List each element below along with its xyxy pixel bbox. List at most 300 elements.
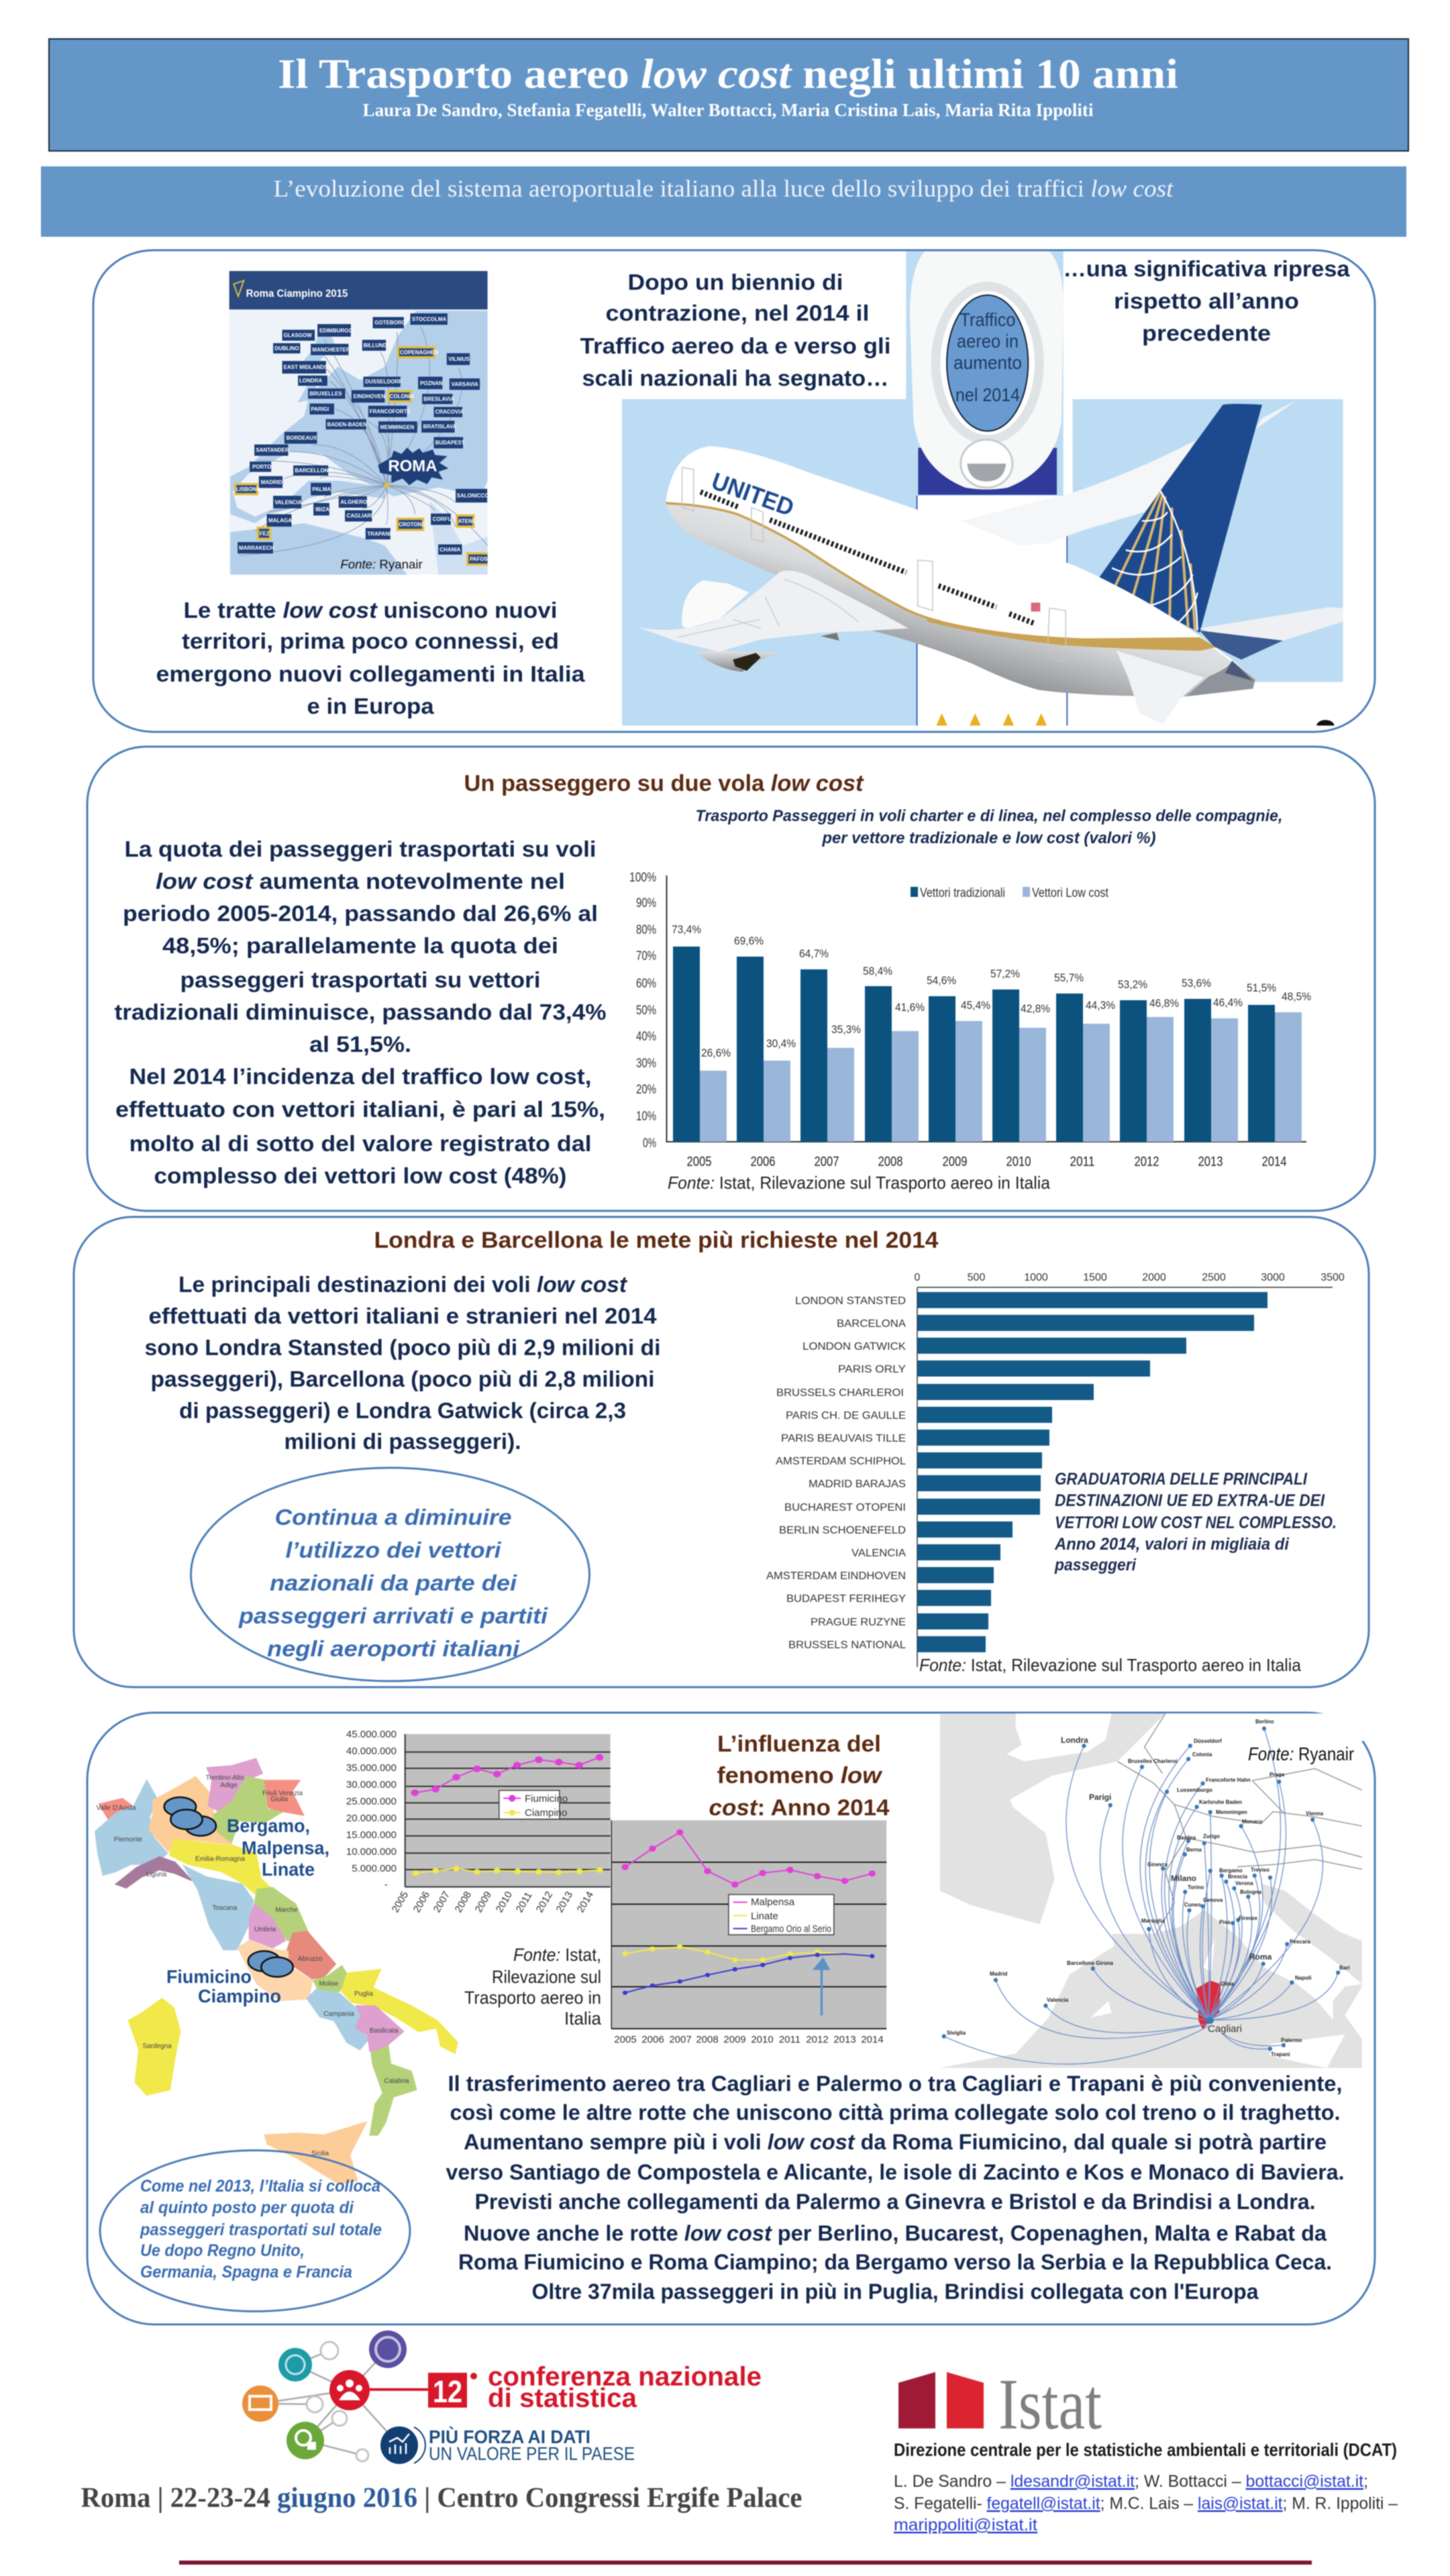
route map from Cagliari: Berna [1186, 1847, 1202, 1853]
Rome Ciampino route map: GOTEBORG [374, 320, 406, 326]
line chart: Rome airports: 40.000.000 [346, 1746, 397, 1757]
route map from Cagliari: Verona [1235, 1880, 1253, 1886]
chart legend [911, 886, 1109, 900]
text: main destinations: Le principali destinazioni dei voli low cost [178, 1272, 628, 1297]
text: passenger share: complesso dei vettori low cost (48%) [154, 1163, 566, 1188]
line chart: Rome airports: 2012 [534, 1890, 555, 1915]
line chart: Rome airports: - [384, 1879, 388, 1890]
chart caption [1054, 1470, 1337, 1574]
Rome Ciampino route map: LONDRA [299, 378, 322, 384]
route map from Cagliari: Torino [1188, 1884, 1204, 1890]
bar chart: destinations ranking: BUCHAREST OTOPENI [784, 1502, 906, 1513]
route map from Cagliari: Trapani [1271, 2051, 1290, 2057]
Rome Ciampino route map: BADEN-BADEN [327, 421, 367, 427]
route map from Cagliari: Marsiglia [1141, 1918, 1165, 1924]
map of Italy: Friuli Venezia [262, 1790, 303, 1797]
line chart: Milan airports: 2006 [641, 2034, 664, 2045]
map labels: Malpensa, [242, 1837, 329, 1858]
map of Italy: Calabria [384, 2078, 409, 2085]
Rome Ciampino route map: SALONICCO [457, 493, 489, 499]
window frame [906, 252, 1064, 496]
map labels: Fiumicino [166, 1966, 252, 1987]
route map from Cagliari: Siviglia [947, 2030, 966, 2036]
callout ellipse: Italy fifth [100, 2151, 410, 2312]
text: main destinations: effettuati da vettori italiani e stranieri nel 2014 [149, 1303, 657, 1328]
line chart: Milan airports: Linate [751, 1911, 778, 1922]
Rome Ciampino route map: ROMA [388, 458, 437, 476]
text: new routes: Oltre 37mila passeggeri in più in Puglia, Brindisi collegata con l'Europa [531, 2279, 1259, 2304]
callout ellipse: Italy fifth: Ue dopo Regno Unito, [140, 2241, 305, 2260]
Rome Ciampino route map: GLASGOW [284, 333, 312, 339]
line chart: Rome airports: 2014 [575, 1890, 596, 1915]
Rome Ciampino route map: PAFOS [470, 556, 488, 562]
bar chart: destinations ranking: BRUSSELS CHARLEROI [776, 1387, 904, 1399]
line chart: Milan airports: Malpensa [751, 1896, 795, 1908]
route map from Cagliari: Bruxelles Charleroi [1128, 1758, 1177, 1764]
line chart: Rome airports: 2010 [494, 1890, 515, 1915]
bar chart: destinations ranking: AMSTERDAM EINDHOVEN [766, 1570, 906, 1582]
chart caption: VETTORI LOW COST NEL COMPLESSO. [1055, 1513, 1337, 1532]
bar chart: traditional vs low cost: 2011 [1070, 1155, 1095, 1169]
line chart: Rome airports: 5.000.000 [352, 1863, 397, 1874]
text: passenger share: passeggeri trasportati su vettori [180, 967, 541, 992]
bar chart: traditional vs low cost: 53,2% [1118, 978, 1147, 991]
Rome Ciampino route map: MANCHESTER [312, 347, 350, 353]
bar chart: traditional vs low cost: 60% [636, 977, 656, 991]
conference logo [242, 2330, 762, 2464]
line chart: Milan airports: 2009 [723, 2034, 746, 2045]
heading: Un passeggero su due vola low cost [464, 771, 864, 796]
map of Italy: Liguria [146, 1871, 166, 1878]
Rome Ciampino route map: ATENE [458, 518, 476, 524]
bar chart: destinations ranking: BARCELONA [837, 1318, 906, 1330]
text: main destinations: sono Londra Stansted (poco più di 2,9 milioni di [145, 1335, 660, 1360]
window label: aumento [953, 352, 1022, 373]
map of Italy: Puglia [354, 1990, 373, 1998]
Rome Ciampino route map: EAST MIDLANDS [284, 364, 328, 370]
Rome Ciampino route map: Fonte: Ryanair [340, 557, 423, 572]
Rome Ciampino route map: BRESLAVIA [423, 396, 454, 402]
map of Italy: Umbria [254, 1926, 276, 1933]
source note: Trasporto aereo in [464, 1988, 601, 2008]
route map from Cagliari: Palermo [1281, 2037, 1302, 2043]
route map from Cagliari: Lussemburgo [1177, 1787, 1212, 1793]
bar chart: traditional vs low cost: 70% [636, 949, 656, 963]
route map from Cagliari: Pescara [1290, 1939, 1310, 1945]
text: new routes: Previsti anche collegamenti da Palermo a Ginevra e Bristol e da Brindisi a Londra. [475, 2190, 1315, 2214]
bar chart: traditional vs low cost: 2006 [750, 1155, 776, 1169]
route map from Cagliari: Francoforte Hahn [1206, 1777, 1251, 1783]
subtitle banner: L’evoluzione del sistema aeroportuale italiano alla luce dello sviluppo dei traffici low cost [274, 175, 1174, 202]
bar chart: traditional vs low cost: 50% [636, 1004, 656, 1018]
map of Italy: Adige [220, 1782, 238, 1789]
bar chart: destinations ranking: LONDON STANSTED [795, 1295, 906, 1307]
Rome Ciampino route map: SANTANDER [256, 447, 289, 453]
callout ellipse: Italy fifth: Come nel 2013, l’Italia si colloca [140, 2177, 380, 2196]
bar chart: destinations ranking: MADRID BARAJAS [809, 1479, 906, 1490]
bar chart: traditional vs low cost: 2013 [1198, 1155, 1223, 1169]
route map from Cagliari: Vienna [1306, 1811, 1324, 1817]
callout ellipse: national carriers [191, 1468, 589, 1681]
line chart: Rome airports: 25.000.000 [346, 1796, 397, 1807]
bar chart: destinations ranking: 2000 [1142, 1272, 1166, 1283]
line chart: Milan airports: 2005 [614, 2034, 637, 2045]
bar chart: traditional vs low cost: 30% [636, 1057, 656, 1071]
Rome Ciampino route map: CORFU [433, 517, 452, 523]
text: after two years of contraction: scali nazionali ha segnato… [582, 366, 888, 390]
text: new routes: così come le altre rotte che uniscono città prima collegate solo col treno o il traghetto. [450, 2100, 1341, 2125]
text: new routes: Il trasferimento aereo tra Cagliari e Palermo o tra Cagliari e Trapani è più conveniente, [448, 2072, 1343, 2096]
route map from Cagliari: Ginevra [1147, 1862, 1168, 1868]
Rome Ciampino route map: BORDEAUX [287, 435, 317, 441]
map labels: Ciampino [198, 1986, 281, 2006]
bar chart: traditional vs low cost: 42,8% [1021, 1002, 1050, 1015]
bar chart: traditional vs low cost: 0% [643, 1136, 656, 1150]
bar chart: destinations ranking: 2500 [1202, 1272, 1226, 1283]
bar chart: destinations ranking: 3500 [1320, 1272, 1345, 1283]
Rome Ciampino route map: COLONIA [390, 393, 415, 399]
Rome Ciampino route map: EINDHOVEN [354, 393, 385, 399]
bar chart: traditional vs low cost: 100% [629, 871, 656, 885]
stabilizer [1200, 607, 1343, 641]
heading [709, 1731, 890, 1821]
route map from Cagliari: Parigi [1089, 1792, 1111, 1802]
map labels [166, 1815, 329, 2006]
source note: Rilevazione sul [492, 1967, 601, 1987]
route map from Cagliari: Pisa [1219, 1919, 1231, 1925]
callout ellipse: national carriers: negli aeroporti italiani [267, 1636, 520, 1661]
route map from Cagliari: Genova [1203, 1897, 1223, 1903]
text: new routes: Nuove anche le rotte low cost per Berlino, Bucarest, Copenaghen, Malta e Rabat da [464, 2221, 1327, 2245]
contacts [894, 2440, 1398, 2534]
source note: Fonte: Istat, Rilevazione sul Trasporto aereo in Italia [919, 1655, 1302, 1675]
bar chart: traditional vs low cost: 80% [636, 923, 656, 937]
map of Italy: Piemonte [114, 1836, 143, 1843]
route map from Cagliari: Cuneo [1184, 1902, 1201, 1908]
conference logo: UN VALORE PER IL PAESE [429, 2443, 635, 2464]
Rome Ciampino route map: PARIGI [311, 406, 329, 412]
text: low cost routes: Le tratte low cost uniscono nuovi [184, 598, 557, 623]
fuselage [666, 446, 1255, 696]
text: passenger share: al 51,5%. [309, 1032, 411, 1057]
panel: one passenger in two [87, 747, 1375, 1211]
text: passenger share: 48,5%; parallelamente la quota dei [162, 933, 558, 958]
route map from Cagliari: Brescia [1228, 1874, 1247, 1880]
bar chart: traditional vs low cost: 35,3% [831, 1023, 861, 1036]
conference logo: di statistica [488, 2383, 637, 2413]
heading: cost: Anno 2014 [709, 1795, 890, 1821]
route map from Cagliari: Karlsruhe Baden [1199, 1799, 1242, 1805]
Rome Ciampino route map: LISBONA [236, 486, 260, 492]
route map from Cagliari: Colonia [1192, 1752, 1212, 1758]
line chart: Rome airports: 2008 [453, 1890, 474, 1915]
window label: Traffico [960, 309, 1016, 330]
window label: aereo in [957, 331, 1019, 352]
line chart: Milan airports: 2011 [779, 2034, 800, 2045]
chart caption: DESTINAZIONI UE ED EXTRA-UE DEI [1055, 1491, 1325, 1510]
bar chart: traditional vs low cost: 53,6% [1182, 977, 1211, 989]
bar chart: traditional vs low cost: 69,6% [734, 934, 764, 947]
bar chart: destinations ranking: PARIS BEAUVAIS TILLE [781, 1433, 906, 1444]
route map from Cagliari: Cagliari [1208, 2023, 1242, 2035]
bar chart: traditional vs low cost: 73,4% [672, 923, 701, 936]
line chart: Milan airports: Bergamo Orio al Serio [751, 1923, 831, 1935]
bar chart: traditional vs low cost: 90% [636, 896, 656, 910]
text: significant recovery: precedente [1142, 321, 1271, 345]
subtitle banner [41, 166, 1406, 237]
Rome Ciampino route map: BRUXELLES [309, 390, 342, 396]
Rome Ciampino route map: CROTONE [399, 522, 425, 528]
bar chart: traditional vs low cost: 57,2% [990, 967, 1020, 980]
line chart: Milan airports: 2013 [833, 2034, 856, 2045]
Rome Ciampino route map: DUSSELDORF [365, 379, 402, 385]
bar chart: traditional vs low cost: 20% [636, 1083, 656, 1097]
text: after two years of contraction: Traffico aereo da e verso gli [580, 333, 891, 358]
Rome Ciampino route map: IBIZA [315, 506, 329, 513]
line chart: Rome airports: 2009 [473, 1890, 494, 1915]
callout ellipse: national carriers: l’utilizzo dei vettori [286, 1538, 501, 1562]
Istat logo: Istat [998, 2365, 1102, 2445]
chart title: per vettore tradizionale e low cost (valori %) [822, 829, 1155, 847]
bar chart: traditional vs low cost: 51,5% [1247, 981, 1276, 994]
text: low cost routes: emergono nuovi collegamenti in Italia [156, 661, 585, 686]
line chart: Rome airports: 45.000.000 [346, 1729, 397, 1740]
route map from Cagliari: Memmingen [1216, 1809, 1247, 1815]
Rome Ciampino route map [229, 271, 489, 575]
route map from Cagliari: Milano [1171, 1874, 1196, 1883]
line chart: Rome airports: 2013 [554, 1890, 575, 1915]
map labels: Bergamo, [227, 1815, 310, 1836]
map of Italy: Emilia-Romagna [195, 1856, 245, 1863]
bar chart: traditional vs low cost: 2007 [815, 1155, 839, 1169]
text: passenger share: low cost aumenta notevolmente nel [156, 869, 565, 894]
contacts: L. De Sandro – ldesandr@istat.it; W. Bottacci – bottacci@istat.it; [894, 2472, 1368, 2491]
line chart: Milan airports: 2010 [751, 2034, 774, 2045]
source note: Fonte: Ryanair [1248, 1743, 1354, 1764]
conference date and venue: Roma | 22-23-24 giugno 2016 | Centro Congressi Ergife Palace [81, 2483, 802, 2514]
route map from Cagliari: Roma [1249, 1952, 1272, 1962]
text: low cost routes: territori, prima poco connessi, ed [182, 629, 559, 653]
bar chart: destinations ranking: AMSTERDAM SCHIPHOL [776, 1456, 906, 1467]
Rome Ciampino route map: BUDAPEST [435, 440, 465, 446]
map of Italy: Basilicata [370, 2027, 399, 2035]
bar chart: traditional vs low cost: 44,3% [1086, 999, 1115, 1012]
Rome Ciampino route map: CHANIA [439, 547, 461, 553]
text: passenger share: molto al di sotto del valore registrato dal [129, 1131, 592, 1156]
bar chart: traditional vs low cost: 40% [636, 1030, 656, 1044]
text: passenger share: tradizionali diminuisce, passando dal 73,4% [114, 1000, 607, 1024]
map of Italy: Molise [319, 1980, 339, 1988]
bar chart: destinations ranking: 500 [968, 1272, 985, 1283]
route map from Cagliari: Treviso [1251, 1867, 1270, 1873]
source note: Italia [564, 2008, 602, 2029]
Rome Ciampino route map: DUBLINO [274, 345, 299, 352]
map of Italy: Abruzzo [298, 1955, 323, 1963]
line chart: Rome airports: Fiumicino [525, 1793, 568, 1805]
source note [464, 1945, 602, 2029]
callout ellipse: Italy fifth: Germania, Spagna e Francia [140, 2263, 352, 2282]
line chart: Rome airports: 35.000.000 [346, 1762, 397, 1774]
window label: nel 2014 [955, 384, 1020, 405]
bar chart: traditional vs low cost: 2009 [942, 1155, 968, 1169]
conference logo: 12 [433, 2374, 462, 2409]
Rome Ciampino route map: BILLUND [364, 343, 387, 349]
Rome Ciampino route map: MARRAKECH [239, 545, 274, 551]
bar chart: destinations ranking: BRUSSELS NATIONAL [788, 1640, 906, 1651]
Rome Ciampino route map: FRANCOFORTE [370, 409, 411, 415]
text: new routes [446, 2072, 1345, 2304]
panel: influence of low cost [87, 1707, 1379, 2324]
bar chart: traditional vs low cost: 30,4% [766, 1037, 796, 1050]
text: passenger share: periodo 2005-2014, passando dal 26,6% al [123, 901, 598, 926]
Rome Ciampino route map: BARCELLONA [295, 468, 332, 474]
Rome Ciampino route map: CRACOVIA [435, 409, 464, 415]
chart caption: GRADUATORIA DELLE PRINCIPALI [1055, 1470, 1308, 1489]
bar chart: traditional vs low cost: 2010 [1006, 1155, 1031, 1169]
text: main destinations [145, 1272, 660, 1454]
bar chart: destinations ranking: 1000 [1024, 1272, 1048, 1283]
bar chart: destinations ranking: 3000 [1261, 1272, 1285, 1283]
route map from Cagliari: Monaco [1242, 1819, 1262, 1825]
text: low cost routes: e in Europa [307, 694, 434, 718]
bar chart: traditional vs low cost: 2012 [1134, 1155, 1159, 1169]
bar chart: destinations ranking: 1500 [1083, 1272, 1107, 1283]
Rome Ciampino route map: PALMA [312, 486, 331, 492]
illustration: United airplane [622, 252, 1343, 726]
title banner: Laura De Sandro, Stefania Fegatelli, Walter Bottacci, Maria Cristina Lais, Maria Rita Ippoliti [362, 100, 1094, 120]
route map from Cagliari: Berlino [1255, 1719, 1274, 1725]
Rome Ciampino route map: MEMMINGEN [380, 424, 414, 430]
bar chart: destinations ranking: PRAGUE RUZYNE [811, 1617, 906, 1628]
heading: Londra e Barcellona le mete più richieste nel 2014 [374, 1228, 939, 1253]
conference logo: PIÙ FORZA AI DATI [429, 2426, 590, 2447]
contacts: marippoliti@istat.it [894, 2516, 1037, 2534]
route map from Cagliari: Düsseldorf [1194, 1738, 1222, 1744]
route map from Cagliari: Valencia [1047, 1997, 1069, 2003]
line chart: Rome airports: 2006 [411, 1890, 432, 1915]
text: main destinations: di passeggeri) e Londra Gatwick (circa 2,3 [179, 1398, 626, 1423]
line chart: Rome airports: Ciampino [525, 1807, 567, 1819]
bar chart: destinations ranking: PARIS ORLY [838, 1364, 906, 1375]
text: significant recovery [1063, 256, 1350, 345]
bar chart: traditional vs low cost: 10% [636, 1110, 656, 1124]
line chart: Milan airports [611, 1821, 886, 2045]
map of Italy: Marche [275, 1907, 298, 1914]
route map from Cagliari: Firenze [1239, 1915, 1258, 1921]
text: new routes: Aumentano sempre più i voli low cost da Roma Fiumicino, dal quale si potrà partire [464, 2130, 1327, 2154]
chart caption: Anno 2014, valori in migliaia di [1054, 1535, 1290, 1554]
route map from Cagliari: Zurigo [1203, 1833, 1220, 1839]
source note: Fonte: Istat, [513, 1945, 601, 1965]
text: after two years of contraction: contrazione, nel 2014 il [605, 301, 870, 325]
bar chart: traditional vs low cost: 46,4% [1213, 996, 1243, 1009]
line chart: Milan airports: 2008 [696, 2034, 719, 2045]
near wing and engine [682, 580, 749, 629]
route map from Cagliari [940, 1707, 1379, 2068]
tail cone [1117, 651, 1204, 724]
Rome Ciampino route map: TRAPANI [367, 531, 391, 537]
window label [953, 309, 1022, 405]
route map from Cagliari: Barcellona Girona [1067, 1960, 1113, 1966]
route map from Cagliari: Bologna [1240, 1889, 1262, 1895]
Rome Ciampino route map: ALGHERO [340, 499, 367, 505]
map of Italy: Campania [323, 2010, 354, 2018]
chart title: Trasporto Passeggeri in voli charter e di linea, nel complesso delle compagnie, [695, 807, 1283, 825]
panel: traffic recovery [93, 250, 1375, 732]
Rome Ciampino route map: FEZ [260, 531, 270, 537]
title banner: Il Trasporto aereo low cost negli ultimi 10 anni [278, 52, 1178, 97]
heading: fenomeno low [717, 1763, 883, 1788]
map of Italy: Toscana [212, 1904, 238, 1912]
chart caption: passeggeri [1054, 1556, 1137, 1574]
bar chart: destinations ranking: BERLIN SCHOENEFELD [779, 1525, 906, 1536]
Rome Ciampino route map: CAGLIARI [347, 513, 372, 519]
line chart: Milan airports: 2012 [806, 2034, 829, 2045]
callout ellipse: national carriers: Continua a diminuire [275, 1505, 511, 1529]
line chart: Rome airports: 2005 [390, 1890, 411, 1915]
Rome Ciampino route map: PORTO [252, 464, 271, 470]
Rome Ciampino route map: VILNIUS [448, 356, 470, 362]
bar chart: destinations ranking: VALENCIA [851, 1548, 906, 1559]
bar chart: traditional vs low cost: 2008 [878, 1155, 903, 1169]
Rome Ciampino route map: Roma Ciampino 2015 [246, 288, 348, 299]
bar chart: traditional vs low cost: 26,6% [701, 1046, 731, 1059]
bar chart: destinations ranking: PARIS CH. DE GAULLE [786, 1410, 906, 1421]
Istat logo [898, 2365, 1102, 2445]
route map from Cagliari: Bergamo [1219, 1868, 1243, 1874]
panel: London and Barcelona [74, 1217, 1369, 1687]
route map from Cagliari: Bari [1339, 1965, 1350, 1971]
text: significant recovery: rispetto all’anno [1114, 288, 1299, 313]
illustration: United airplane: UNITED [708, 467, 798, 521]
Rome Ciampino route map: BRATISLAVA [423, 424, 457, 430]
line chart: Rome airports: 15.000.000 [346, 1829, 397, 1841]
bar chart: traditional vs low cost: 46,8% [1149, 997, 1179, 1010]
Rome Ciampino route map: COPENAGHEN [400, 350, 438, 356]
text: new routes: verso Santiago de Compostela e Alicante, le isole di Zacinto e Kos e Monaco di Baviera. [446, 2160, 1345, 2184]
Rome Ciampino route map: MADRID [261, 479, 282, 485]
route map from Cagliari: Olbia [1221, 1981, 1235, 1987]
text: passenger share [114, 837, 607, 1188]
route map from Cagliari: Madrid [990, 1971, 1007, 1977]
Rome Ciampino route map: VALENCIA [274, 499, 302, 505]
callout ellipse: Italy fifth: passeggeri trasportati sul totale [140, 2220, 382, 2239]
bar chart: traditional vs low cost: 2005 [687, 1155, 711, 1169]
text: passenger share: Nel 2014 l’incidenza del traffico low cost, [129, 1064, 592, 1089]
conference logo: conferenza nazionale [488, 2362, 762, 2392]
bar chart: traditional vs low cost: 54,6% [927, 974, 956, 987]
text: main destinations: milioni di passeggeri). [284, 1429, 521, 1454]
line chart: Rome airports: 2007 [431, 1890, 452, 1915]
text: new routes: Roma Fiumicino e Roma Ciampino; da Bergamo verso la Serbia e la Repubblica Ceca. [458, 2250, 1332, 2274]
chart legend: Vettori Low cost [1032, 886, 1109, 900]
bar chart: destinations ranking: BUDAPEST FERIHEGY [786, 1593, 906, 1605]
chart legend: Vettori tradizionali [920, 886, 1005, 900]
line chart: Rome airports: 10.000.000 [346, 1846, 397, 1858]
bar chart: traditional vs low cost: 45,4% [961, 999, 990, 1012]
bar chart: traditional vs low cost: 41,6% [895, 1001, 925, 1014]
route map from Cagliari: Basilea [1177, 1835, 1196, 1841]
arrow [815, 1960, 828, 2015]
tail fin [1098, 404, 1262, 633]
map of Italy: Sicilia [311, 2150, 329, 2157]
text: passenger share: effettuato con vettori italiani, è pari al 15%, [115, 1097, 605, 1122]
text: low cost routes [156, 598, 585, 718]
far wing [962, 441, 1195, 545]
bar chart: traditional vs low cost: 58,4% [863, 965, 892, 977]
bar chart: destinations ranking: 0 [915, 1272, 921, 1283]
text: passenger share: La quota dei passeggeri trasportati su voli [125, 837, 596, 861]
